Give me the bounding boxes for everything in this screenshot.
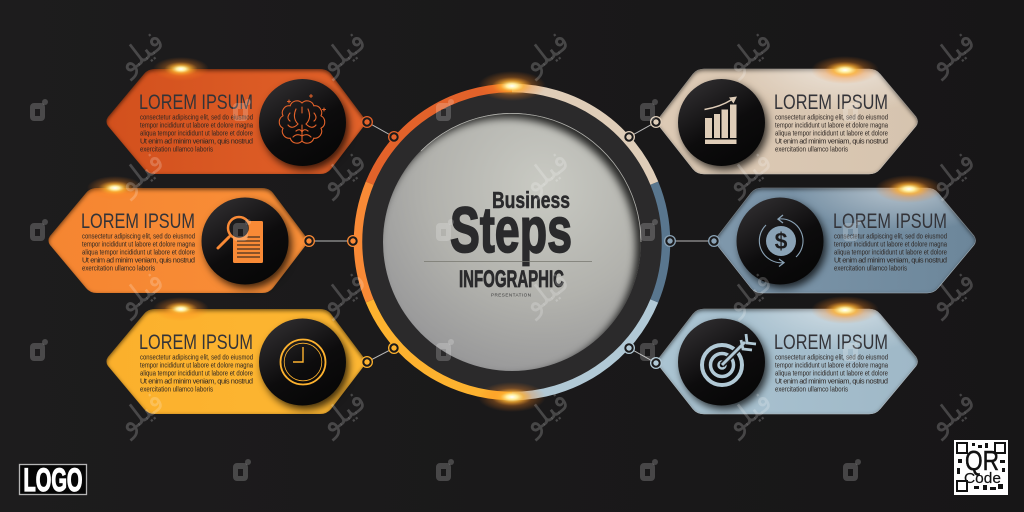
central ring <box>358 88 666 396</box>
icon disc: document search <box>202 198 288 284</box>
QR code: QR <box>965 445 999 476</box>
body text: exercitation ullamco laboris <box>140 144 213 154</box>
watermark: logo text: فيلو <box>718 384 779 443</box>
panel sheen <box>656 309 918 414</box>
heading: LOREM IPSUM <box>139 331 253 354</box>
heading: LOREM IPSUM <box>139 91 253 114</box>
body text: aliqua tempor incididunt ut labore et dolore <box>775 128 888 138</box>
panel shape <box>106 69 367 174</box>
watermark: logo text: فيلو <box>921 384 982 443</box>
panel sheen <box>714 188 976 293</box>
logo badge <box>20 462 86 498</box>
watermark: logo text: فيلو <box>515 264 576 323</box>
watermark: logo text: فيلو <box>110 24 171 83</box>
icon disc: target <box>678 318 765 406</box>
panel shape <box>48 188 309 293</box>
body text: aliqua tempor incididunt ut labore et dolore <box>82 248 195 256</box>
body text: aliqua tempor incididunt ut labore et dolore <box>140 368 253 378</box>
watermark: logo text: فيلو <box>312 384 373 443</box>
watermark: logo text: فيلو <box>312 144 373 203</box>
body text: Ut enim ad minim veniam, quis nostrud <box>775 136 888 146</box>
watermark: logo text <box>110 24 982 443</box>
body text: Ut enim ad minim veniam, quis nostrud <box>140 376 253 386</box>
panel shape <box>106 309 367 414</box>
body text: tempor incididunt ut labore et dolore magna <box>775 360 889 370</box>
panel: step 5 steel <box>714 188 976 293</box>
body text <box>140 352 254 394</box>
watermark: logo text: فيلو <box>312 264 373 323</box>
watermark: logo text: فيلو <box>515 144 576 203</box>
heading: LOREM IPSUM <box>774 331 888 354</box>
watermark: logo text: فيلو <box>110 384 171 443</box>
body text <box>834 232 948 272</box>
ring segment: yellow <box>370 301 512 396</box>
body text: exercitation ullamco laboris <box>834 264 907 272</box>
panel: step 4 beige <box>656 69 918 174</box>
body text: tempor incididunt ut labore et dolore magna <box>140 120 254 130</box>
ring segment: red <box>370 88 512 183</box>
panel shape <box>714 188 976 293</box>
body text: consectetur adipiscing elit, sed do eiusmod <box>140 112 253 122</box>
watermark: logo text: فيلو <box>718 264 779 323</box>
body text: tempor incididunt ut labore et dolore magna <box>140 360 254 370</box>
disc highlight <box>421 113 641 242</box>
body text <box>775 352 889 394</box>
body text: consectetur adipiscing elit, sed do eiusmod <box>82 232 195 240</box>
body text: Ut enim ad minim veniam, quis nostrud <box>82 256 195 264</box>
body text: exercitation ullamco laboris <box>775 384 848 394</box>
watermark: logo text: فيلو <box>110 144 171 203</box>
divider <box>424 260 592 262</box>
watermark: logo text: فيلو <box>515 24 576 83</box>
body text: Ut enim ad minim veniam, quis nostrud <box>140 136 253 146</box>
icon disc: bar chart <box>678 79 765 166</box>
icon disc: clock <box>259 318 346 406</box>
ring segment: beige <box>512 88 654 183</box>
body text: aliqua tempor incididunt ut labore et dolore <box>140 128 253 138</box>
panel: step 3 yellow <box>106 309 367 414</box>
panel: step 1 red <box>106 69 367 174</box>
watermark: logo text: فيلو <box>921 24 982 83</box>
ring segment: steel <box>654 183 666 301</box>
light flares <box>87 56 943 412</box>
watermark: badge icons <box>30 99 861 481</box>
body text: tempor incididunt ut labore et dolore magna <box>775 120 889 130</box>
heading: LOREM IPSUM <box>81 210 195 233</box>
body text: exercitation ullamco laboris <box>775 144 848 154</box>
body text: consectetur adipiscing elit, sed do eiusmod <box>834 232 947 240</box>
connector lines <box>309 122 714 363</box>
ring segment: orange <box>358 183 370 301</box>
heading: Infographic: INFOGRAPHIC <box>459 266 564 293</box>
ring segment: light blue <box>512 301 654 396</box>
heading: Steps: Steps <box>450 194 572 266</box>
title block <box>424 187 592 298</box>
body text: exercitation ullamco laboris <box>82 264 155 272</box>
body text <box>775 112 889 154</box>
panel: step 6 light blue <box>656 309 918 414</box>
panel sheen <box>656 69 918 174</box>
QR code: Code <box>964 470 1001 487</box>
gray disc <box>383 113 641 371</box>
watermark: logo text: فيلو <box>718 144 779 203</box>
dark band <box>361 91 663 393</box>
watermark: logo text: فيلو <box>921 144 982 203</box>
heading: Business: Business <box>492 187 570 213</box>
heading: LOREM IPSUM <box>833 210 947 233</box>
body text: consectetur adipiscing elit, sed do eiusmod <box>775 112 888 122</box>
body text <box>140 112 254 154</box>
watermark: logo text: فيلو <box>110 264 171 323</box>
watermark: logo text: فيلو <box>921 264 982 323</box>
heading: LOREM IPSUM <box>774 91 888 114</box>
body text: consectetur adipiscing elit, sed do eiusmod <box>140 352 253 362</box>
watermark: logo text: فيلو <box>312 24 373 83</box>
body text <box>82 232 196 272</box>
watermark: logo text: فيلو <box>515 384 576 443</box>
panel shape <box>656 309 918 414</box>
subheading: PRESENTATION <box>491 292 531 298</box>
body text: consectetur adipiscing elit, sed do eiusmod <box>775 352 888 362</box>
connector nodes <box>303 116 720 369</box>
body text: tempor incididunt ut labore et dolore magna <box>834 240 948 248</box>
body text: aliqua tempor incididunt ut labore et dolore <box>775 368 888 378</box>
body text: aliqua tempor incididunt ut labore et dolore <box>834 248 947 256</box>
panel: step 2 orange <box>48 188 309 293</box>
body text: exercitation ullamco laboris <box>140 384 213 394</box>
watermark: logo text: فيلو <box>718 24 779 83</box>
QR code <box>954 440 1008 495</box>
body text: Ut enim ad minim veniam, quis nostrud <box>834 256 947 264</box>
icon disc: brain <box>259 79 346 166</box>
logo badge: LOGO <box>24 462 82 498</box>
body text: tempor incididunt ut labore et dolore magna <box>82 240 196 248</box>
icon disc: dollar: $ <box>775 228 788 254</box>
panel shape <box>656 69 918 174</box>
body text: Ut enim ad minim veniam, quis nostrud <box>775 376 888 386</box>
icon disc: dollar <box>736 198 824 284</box>
